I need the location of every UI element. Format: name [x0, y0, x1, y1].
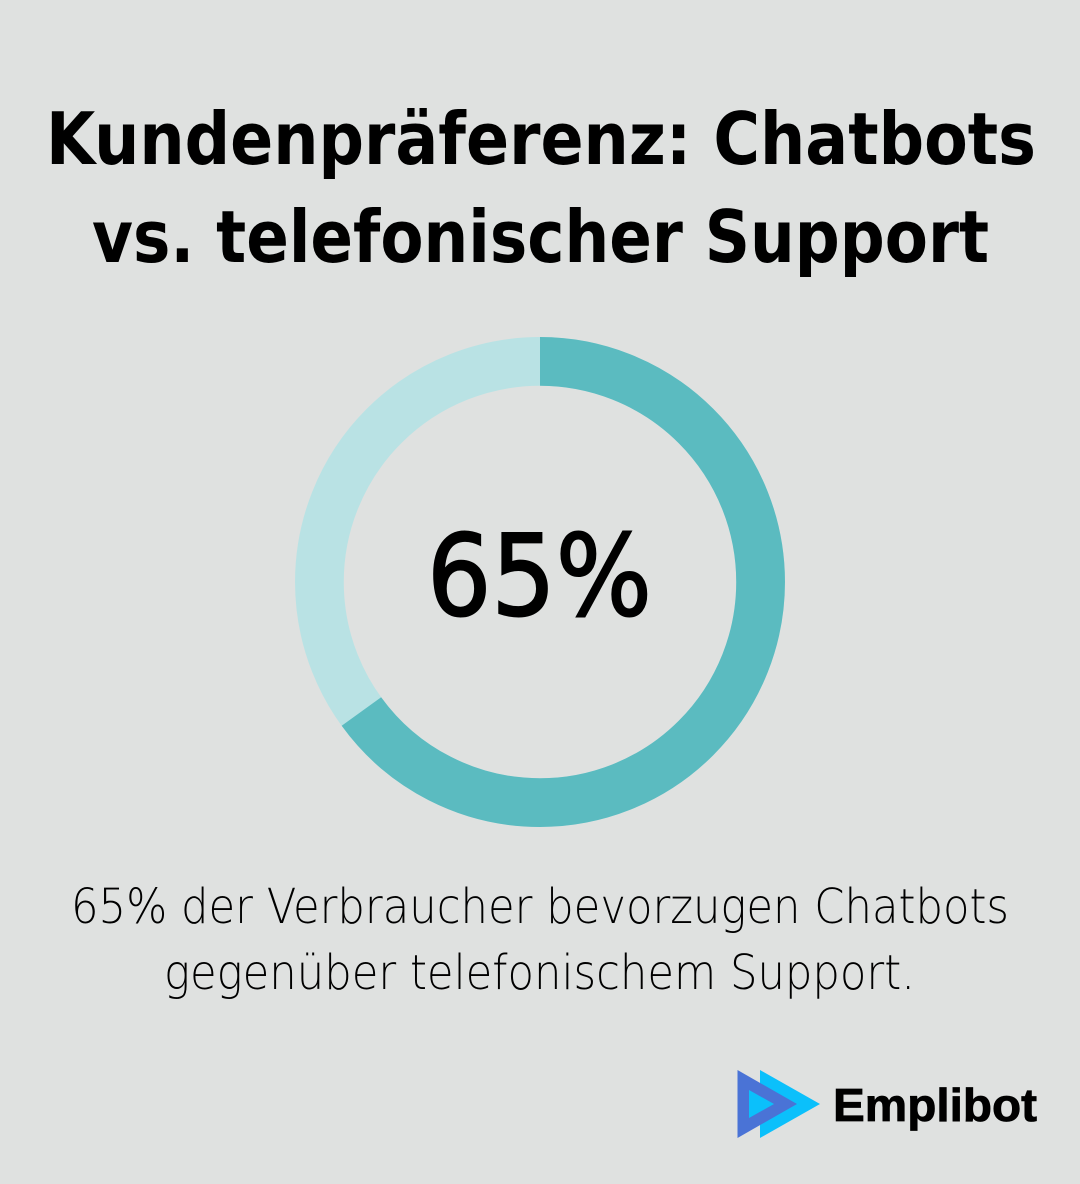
logo wordmark: Emplibot: [833, 1079, 1037, 1131]
donut track: remaining share: [319, 361, 761, 803]
center value: 65%: [427, 512, 652, 642]
title: [46, 97, 1036, 279]
icon: play triangles: [738, 1070, 820, 1138]
donut chart: 65 percent: [319, 361, 761, 803]
caption: 65% der Verbraucher bevorzugen Chatbots: [71, 879, 1009, 935]
logo: Emplibot: [738, 1070, 1037, 1138]
caption: [71, 879, 1009, 1001]
caption: gegenüber telefonischem Support.: [164, 945, 915, 1001]
donut segment: 65 percent share: [319, 361, 761, 803]
